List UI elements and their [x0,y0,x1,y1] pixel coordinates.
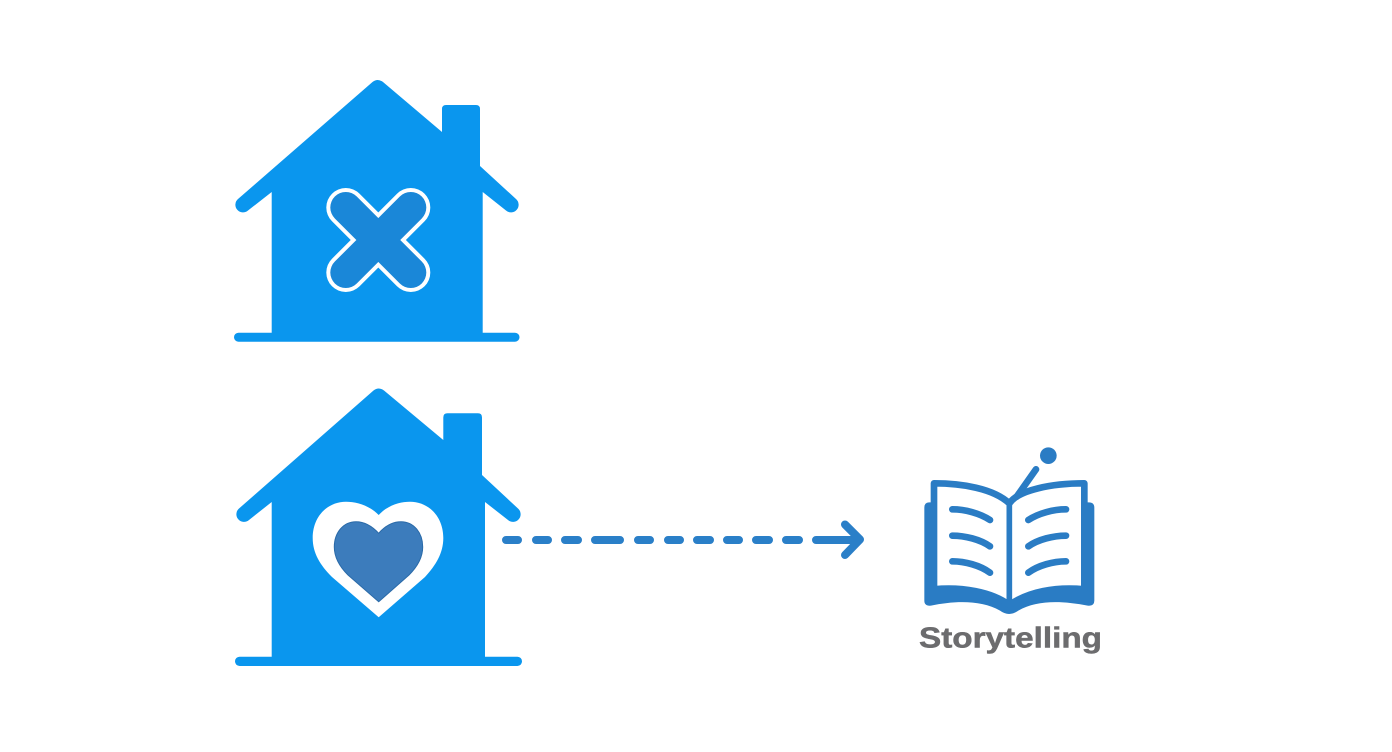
book spine [1001,503,1018,607]
X mark [346,208,411,272]
ground line [235,657,522,666]
house body [236,388,521,660]
icon: house with X [234,80,520,342]
icon: house with heart [235,388,522,666]
book pages [934,483,1084,605]
house body [235,80,519,335]
label: Storytelling: Storytelling [919,622,1102,654]
white heart [313,502,443,617]
ground line [234,333,520,342]
blue heart [334,522,423,602]
book cover [924,502,1094,614]
dashed arrow [506,524,860,555]
pen dot [1040,447,1057,464]
icon: open book [924,447,1094,614]
pen stroke [1017,469,1036,497]
text lines [952,509,1066,573]
arrow head [845,524,860,555]
